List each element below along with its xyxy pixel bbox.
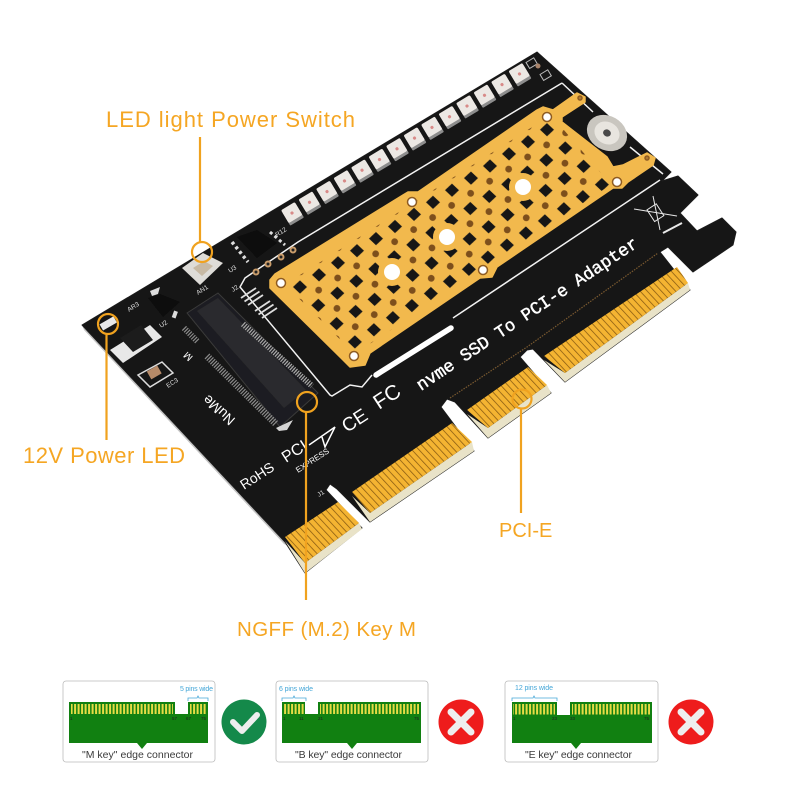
- board text: RoHS: RoHS: [237, 459, 277, 493]
- caption: "B key" edge connector: [295, 749, 402, 761]
- power LED: [100, 316, 117, 330]
- board text: small reference designators: U2: [158, 319, 169, 330]
- PCB edge with B key notch: [282, 702, 421, 749]
- label text: 12V Power LED: [23, 443, 185, 468]
- board text: small reference designators: J2: [230, 284, 240, 294]
- pin numbers: 1: [513, 716, 516, 721]
- leader line and ring: [512, 390, 532, 513]
- mounting screw: [580, 108, 634, 158]
- pin width note: 5 pins wide: [180, 686, 213, 693]
- U2 transistor: [148, 287, 180, 318]
- pin numbers: [283, 716, 420, 721]
- board text: small reference designators: EC3: [165, 377, 180, 390]
- PCB edge with E key notch: [512, 702, 652, 749]
- pin numbers: 75: [644, 716, 650, 721]
- board text: small reference designators: U3: [227, 264, 238, 275]
- label text: NGFF (M.2) Key M: [237, 618, 416, 641]
- pin numbers: [70, 716, 207, 721]
- J2 via rings: [254, 248, 296, 274]
- board text: small reference designators: AN1: [195, 284, 210, 297]
- pin numbers: [513, 716, 650, 721]
- M.2 connector: [184, 293, 318, 431]
- caption: "M key" edge connector: [82, 749, 194, 761]
- board text: small reference designators: J1: [316, 489, 326, 499]
- pin width note: [512, 685, 557, 701]
- FCC mark: FC: [369, 380, 405, 414]
- pin numbers: 1: [70, 716, 73, 721]
- leader line and ring: [192, 137, 212, 262]
- pin numbers: 11: [299, 716, 304, 721]
- PCI-E gold fingers: [285, 267, 688, 563]
- recycle-bin mark: [634, 196, 682, 233]
- pin width note: 6 pins wide: [279, 686, 313, 693]
- board text: PCI Express logo: PCI: [279, 438, 311, 466]
- CE mark: CE: [338, 405, 372, 437]
- pin numbers: 23: [552, 716, 558, 721]
- plate corner holes: [276, 96, 649, 360]
- label text: LED light Power Switch: [106, 107, 355, 132]
- label text: PCI-E: [499, 520, 552, 542]
- callout: 12V Power LED: [23, 314, 185, 468]
- PCB edge with M key notch: [69, 702, 208, 749]
- white slot: [376, 328, 451, 375]
- PCB body: [82, 52, 736, 573]
- leader line and ring: [297, 392, 317, 600]
- pin numbers: 75: [201, 716, 207, 721]
- gold finger edge bevels: [285, 283, 690, 573]
- board text: small reference designators: AR3: [126, 301, 141, 314]
- U3 chip: [232, 230, 285, 262]
- icon: green check: [222, 700, 266, 744]
- PCB side edge: [82, 325, 288, 546]
- board text: nvme SSD To PCI-e Adapter: nvme SSD To PCI-e Adapter: [413, 234, 643, 396]
- silkscreen frame: [240, 83, 562, 396]
- panel: B key connector: [276, 681, 428, 762]
- board text: M key: M: [182, 349, 195, 363]
- board text: NVMe: NuMe: [199, 392, 238, 429]
- pin width note: 12 pins wide: [515, 685, 553, 692]
- plate perforation grid: [285, 115, 611, 354]
- callout: PCI-E: [499, 390, 552, 542]
- pin numbers: 21: [318, 716, 324, 721]
- pin numbers: 57: [172, 716, 178, 721]
- pin width note: [180, 686, 213, 701]
- EC3 capacitor: [138, 362, 173, 387]
- power regulator: [110, 325, 162, 363]
- board text: small reference designators: [126, 226, 326, 499]
- product photo: PCIe adapter board: [82, 52, 736, 573]
- plate large mounting holes: [378, 173, 537, 286]
- caption: "E key" edge connector: [525, 749, 632, 761]
- LED strip: [281, 63, 532, 226]
- pin numbers: 33: [570, 716, 576, 721]
- J2 comb pads: [241, 288, 277, 318]
- board text: small reference designators: R12: [274, 226, 288, 239]
- panel: M key connector: [63, 681, 215, 762]
- callout: NGFF (M.2) Key M: [237, 392, 416, 641]
- panel: E key connector: [505, 681, 658, 762]
- power switch: [182, 253, 223, 285]
- callout: LED light Power Switch: [106, 107, 355, 262]
- gold SSD mounting plate: [270, 93, 655, 367]
- pin width note: [279, 686, 313, 701]
- icon: red cross 2: [668, 700, 714, 744]
- pin numbers: 1: [283, 716, 286, 721]
- leader line and ring: [98, 314, 118, 440]
- corner silk pads: [526, 58, 551, 80]
- pin numbers: 67: [186, 716, 192, 721]
- board text: PCI Express logo: [279, 427, 335, 475]
- board text: PCI Express logo: EXPRESS: [294, 447, 331, 475]
- icon: red cross 1: [438, 700, 484, 744]
- pin numbers: 75: [414, 716, 420, 721]
- trace line above fingers: [450, 253, 658, 398]
